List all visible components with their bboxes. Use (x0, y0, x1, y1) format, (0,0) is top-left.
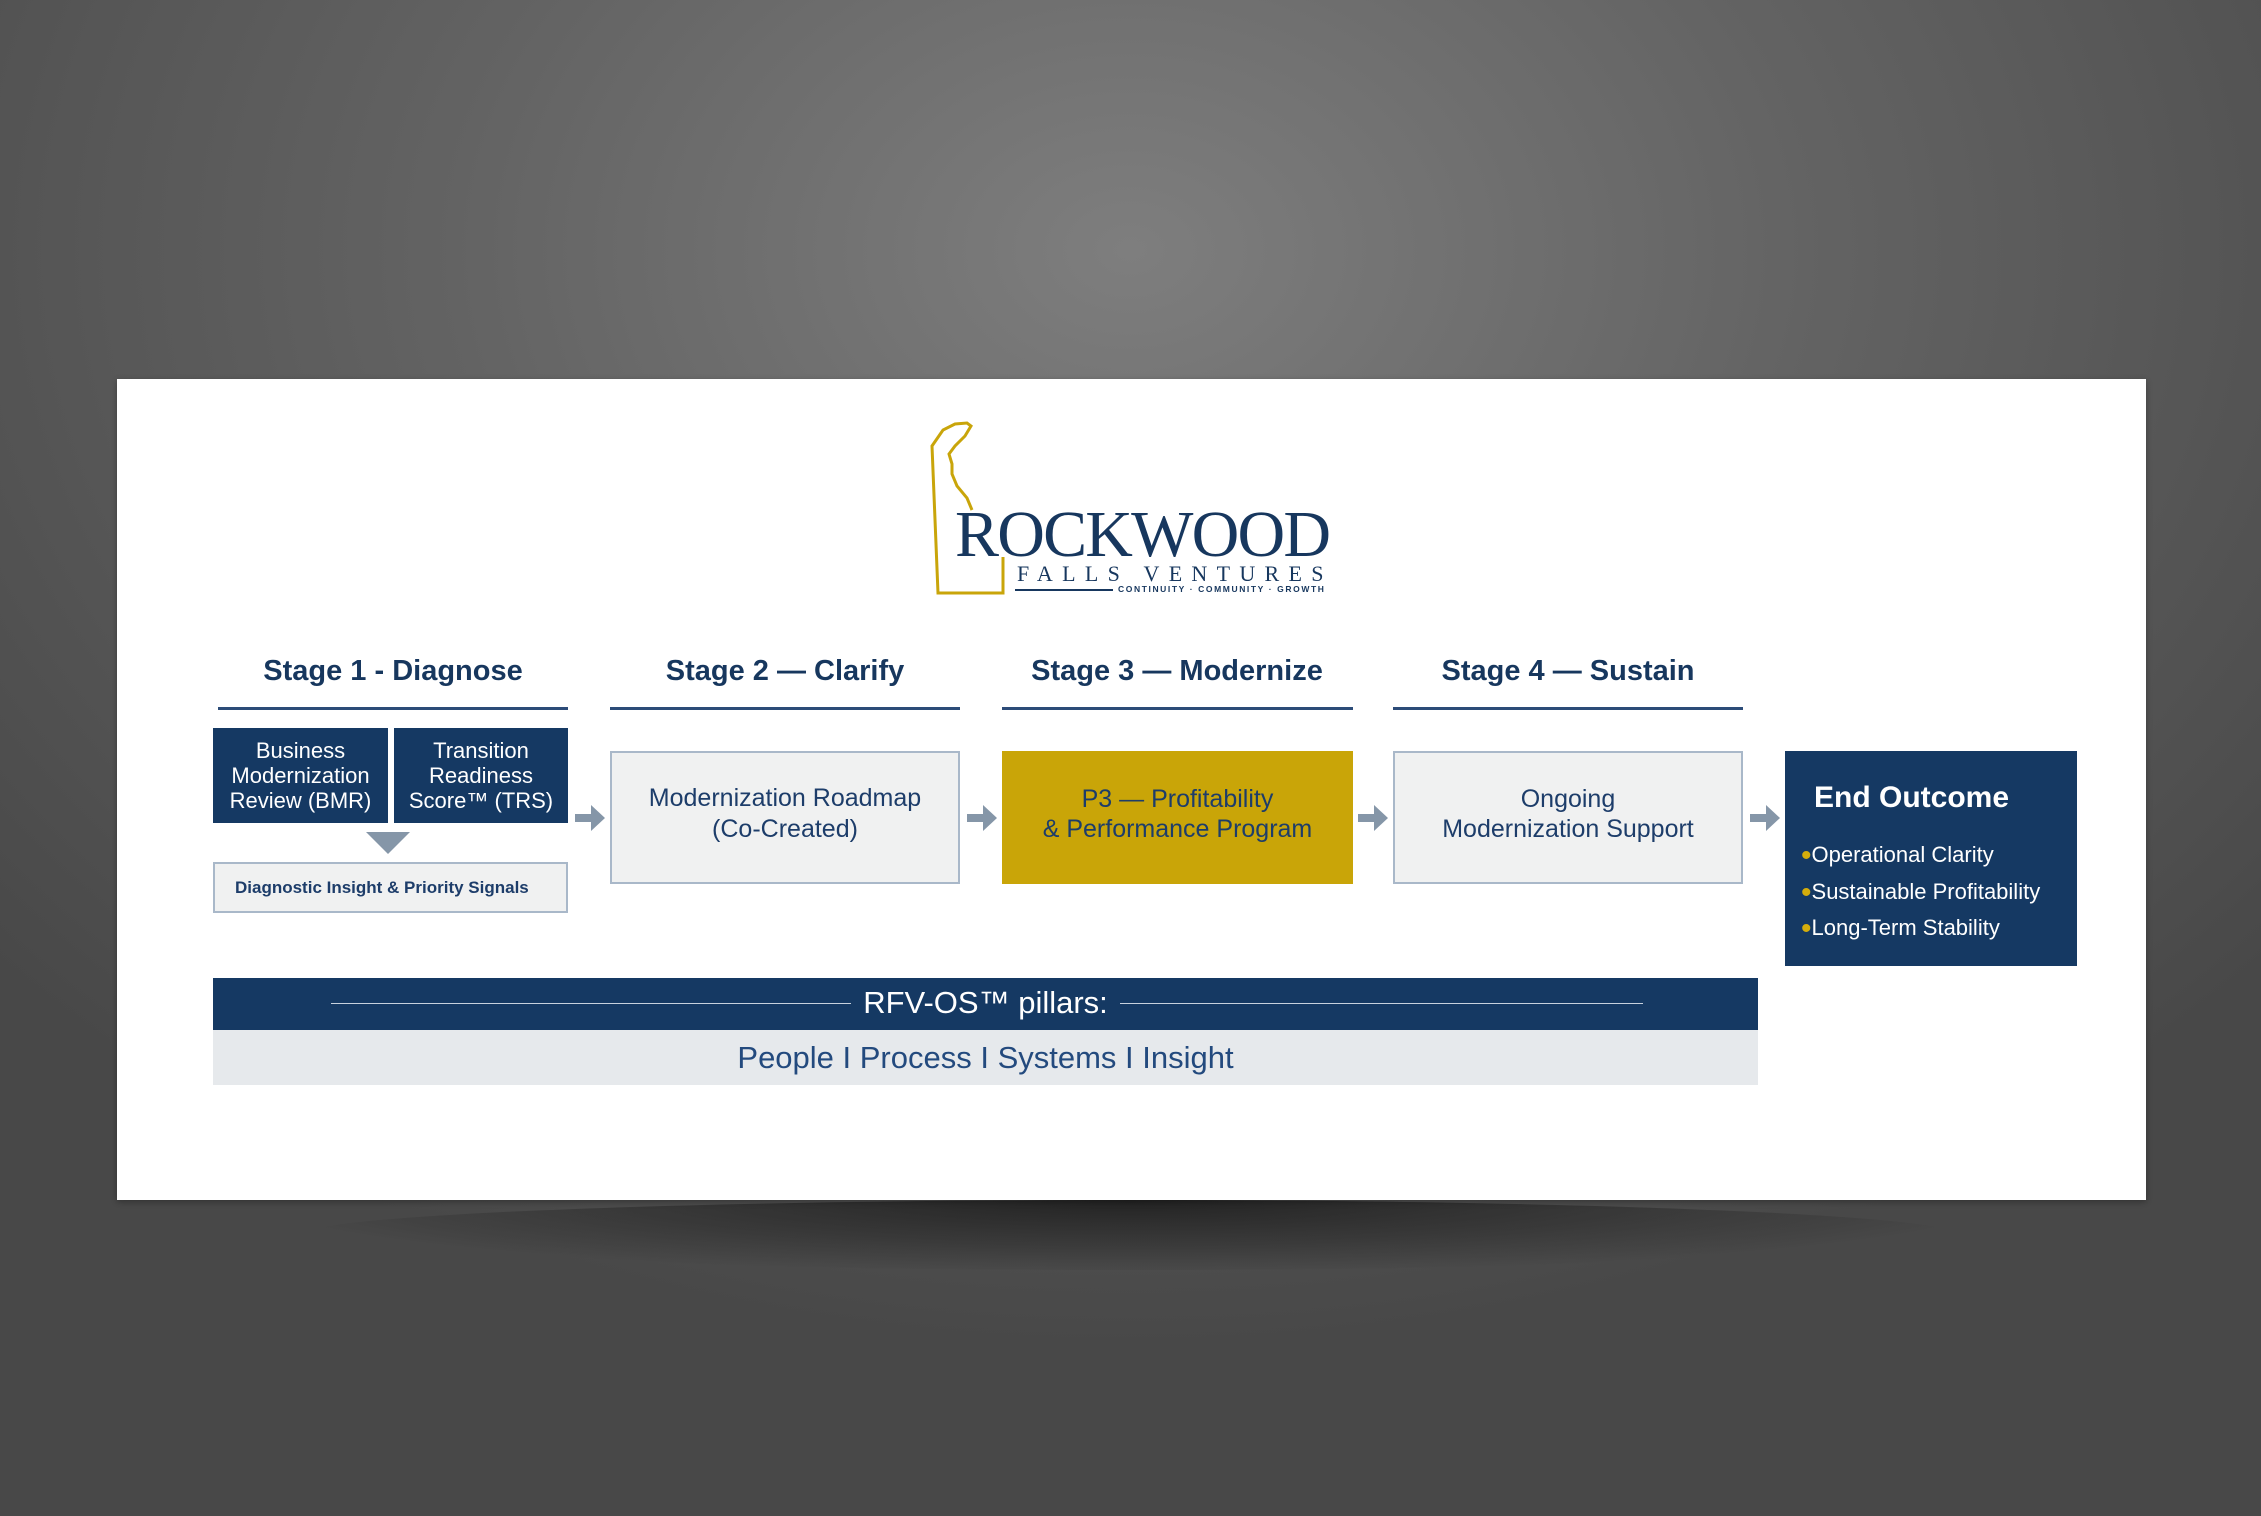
arrow 3 (1358, 805, 1388, 831)
panel: end outcome (1785, 751, 2077, 966)
box: diagnostic insight: Diagnostic Insight & Priority Signals (235, 878, 529, 897)
heading: stage 2: Stage 2 — Clarify (666, 655, 904, 687)
icon: state outline (930, 422, 1004, 594)
box: roadmap: Modernization Roadmap (649, 784, 921, 812)
banner: RFV-OS pillars: RFV-OS™ pillars: (863, 985, 1108, 1020)
arrow 2 (967, 805, 997, 831)
logo: CONTINUITY · COMMUNITY · GROWTH (1118, 584, 1325, 594)
list: outcomes: •Operational Clarity (1801, 839, 1994, 872)
logo: FALLS VENTURES (1017, 561, 1333, 586)
box: diagnostic insight (213, 862, 568, 913)
box: P3: & Performance Program (1043, 814, 1312, 842)
box: TRS (394, 728, 568, 823)
panel: white card (117, 379, 2146, 1200)
box: BMR: Review (BMR) (230, 788, 371, 813)
arrow 4 (1750, 805, 1780, 831)
box: ongoing support (1393, 751, 1743, 884)
box: BMR: Modernization (231, 763, 370, 788)
box: BMR: Business (256, 738, 345, 763)
heading: stage 4: Stage 4 — Sustain (1441, 655, 1694, 687)
banner: RFV-OS pillars (213, 978, 1758, 1030)
box: P3 (1002, 751, 1353, 884)
heading: stage 1: Stage 1 - Diagnose (263, 655, 523, 687)
list: outcomes (1801, 839, 2040, 945)
logo (930, 422, 1333, 594)
icon: down triangle (366, 832, 410, 854)
box: roadmap: (Co-Created) (712, 814, 858, 842)
arrow 1 (575, 805, 605, 831)
box: ongoing support: Modernization Support (1442, 814, 1694, 842)
box: roadmap (610, 751, 960, 884)
box: TRS: Transition (433, 738, 529, 763)
heading: stage 3: Stage 3 — Modernize (1031, 655, 1323, 687)
box: TRS: Readiness (429, 763, 533, 788)
pillars text: People I Process I Systems I Insight (737, 1040, 1234, 1075)
list: outcomes: •Long-Term Stability (1801, 912, 2000, 945)
logo wordmark: ROCKWOOD (955, 498, 1329, 571)
box: ongoing support: Ongoing (1521, 784, 1615, 812)
heading: end outcome: End Outcome (1814, 781, 2009, 814)
box: P3: P3 — Profitability (1082, 784, 1273, 812)
list: outcomes: •Sustainable Profitability (1801, 876, 2040, 908)
box: BMR (213, 728, 388, 823)
box: TRS: Score™ (TRS) (409, 788, 553, 813)
pillars text (213, 1030, 1758, 1085)
